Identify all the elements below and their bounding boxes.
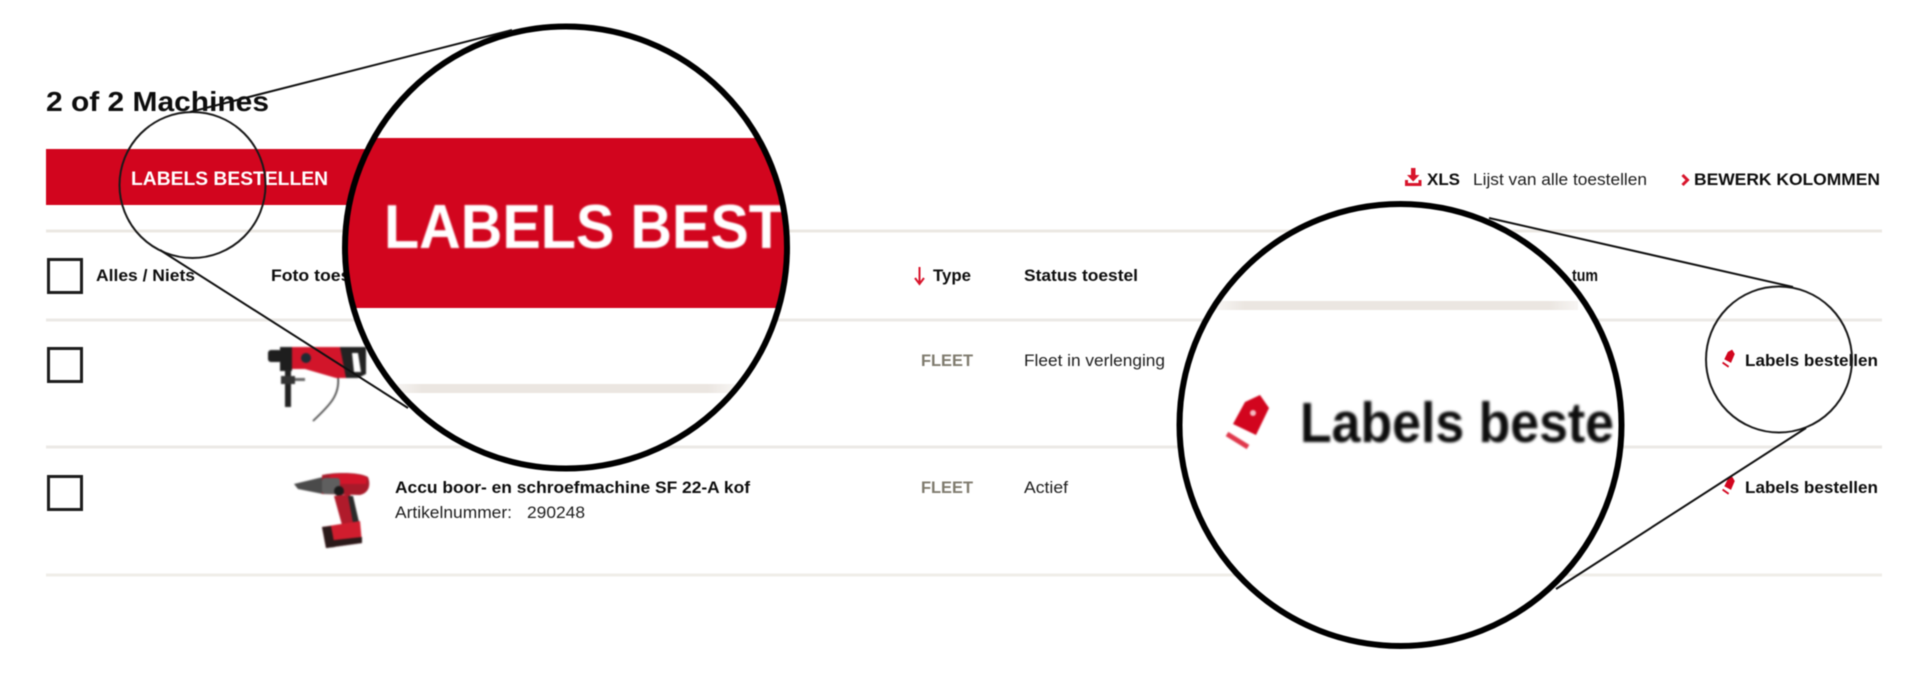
icon: sort arrow (915, 267, 924, 284)
icon: tag (1723, 350, 1735, 367)
table header (48, 260, 1598, 292)
callout right: source circle (1706, 286, 1852, 432)
row 2: Labels bestellen (1745, 478, 1878, 497)
icon: chevron (1682, 175, 1688, 185)
article number: 290248 (527, 503, 585, 522)
row 1: FLEET (921, 352, 973, 370)
icon: magnified tag (1227, 395, 1269, 447)
row 1 (48, 347, 1878, 421)
machine name: Accu boor- en schroefmachine SF 22-A kof (395, 478, 750, 497)
magnified content: LABELS BEST (384, 193, 784, 262)
image: diamond drill (268, 347, 366, 421)
image: cordless drill (294, 473, 369, 548)
callout left: magnifier (340, 26, 800, 470)
article number (395, 503, 585, 522)
magnified content (1216, 301, 1614, 455)
table header: Type (933, 266, 971, 285)
callout right: connector lines (1489, 218, 1806, 589)
toolbar: edit columns: BEWERK KOLOMMEN (1694, 170, 1880, 189)
table header: tum (1572, 266, 1598, 285)
callout left: source circle (120, 112, 266, 258)
button label: LABELS BESTELLEN (131, 169, 328, 190)
title: 2 of 2 Machines (46, 86, 269, 117)
icon: download (1405, 168, 1422, 186)
callout right: magnifier (1178, 203, 1622, 647)
toolbar: XLS export: Lijst van alle toestellen (1473, 170, 1647, 189)
checkbox: row 1 (48, 348, 82, 382)
toolbar: XLS export: XLS (1427, 170, 1460, 189)
table header: Foto toestel (271, 266, 371, 285)
magnified content: Labels beste (1300, 391, 1614, 455)
toolbar: XLS export (1405, 168, 1647, 189)
icon: tag (1723, 477, 1735, 494)
row 2: FLEET (921, 479, 973, 497)
checkbox: row 2 (48, 476, 82, 510)
row 2: Actief (1024, 478, 1068, 497)
row 1: Fleet in verlenging (1024, 351, 1165, 370)
row 2 (48, 473, 1878, 548)
article number: Artikelnummer: (395, 503, 512, 522)
table header: Alles / Niets (96, 266, 195, 285)
callout left: connector lines (160, 30, 512, 408)
magnified content (340, 138, 800, 393)
table header: Status toestel (1024, 266, 1138, 285)
checkbox: all (48, 260, 82, 292)
row 1: Labels bestellen (1745, 351, 1878, 370)
action bar (46, 149, 406, 205)
